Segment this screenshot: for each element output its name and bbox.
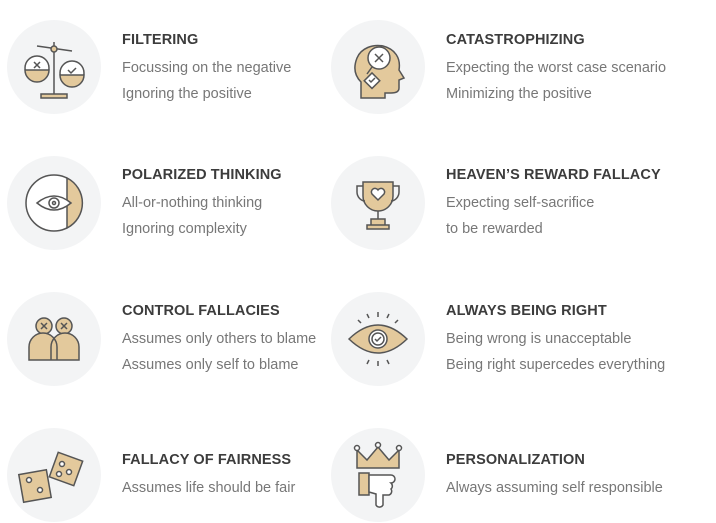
text: polarized: All-or-nothing thinking <box>122 195 262 211</box>
text: fairness: Assumes life should be fair <box>122 480 295 496</box>
icon: scales <box>7 20 101 114</box>
icon: head with magnifier <box>331 20 425 114</box>
icon: trophy <box>331 156 425 250</box>
text: catastrophizing <box>446 60 666 102</box>
text: filtering: Ignoring the positive <box>122 86 252 102</box>
text: personalization: Always assuming self responsible <box>446 480 663 496</box>
text: polarized: Ignoring complexity <box>122 221 247 237</box>
text: control: Assumes only self to blame <box>122 357 298 373</box>
text: heaven's reward: to be rewarded <box>446 221 543 237</box>
text: filtering <box>122 60 291 102</box>
text: polarized <box>122 195 262 237</box>
title: fallacy of fairness: FALLACY OF FAIRNESS <box>122 452 291 468</box>
icon: eye with check <box>331 292 425 386</box>
text: heaven's reward <box>446 195 594 237</box>
title: control fallacies: CONTROL FALLACIES <box>122 303 280 319</box>
title: always being right: ALWAYS BEING RIGHT <box>446 303 607 319</box>
text: catastrophizing: Minimizing the positive <box>446 86 592 102</box>
title: polarized thinking: POLARIZED THINKING <box>122 167 282 183</box>
icon: split eye circle <box>7 156 101 250</box>
title: filtering: FILTERING <box>122 32 198 48</box>
title: catastrophizing: CATASTROPHIZING <box>446 32 585 48</box>
title: heaven's reward: HEAVEN’S REWARD FALLACY <box>446 167 661 183</box>
icon: dice <box>7 428 101 522</box>
text: always right: Being wrong is unacceptable <box>446 331 631 347</box>
text: catastrophizing: Expecting the worst case scenario <box>446 60 666 76</box>
text: always right <box>446 331 665 373</box>
text: control <box>122 331 316 373</box>
text: heaven's reward: Expecting self-sacrifice <box>446 195 594 211</box>
text: filtering: Focussing on the negative <box>122 60 291 76</box>
text: always right: Being right supercedes everything <box>446 357 665 373</box>
text: control: Assumes only others to blame <box>122 331 316 347</box>
icon: two people <box>7 292 101 386</box>
title: personalization: PERSONALIZATION <box>446 452 585 468</box>
icon: crown and thumbs down <box>331 428 425 522</box>
